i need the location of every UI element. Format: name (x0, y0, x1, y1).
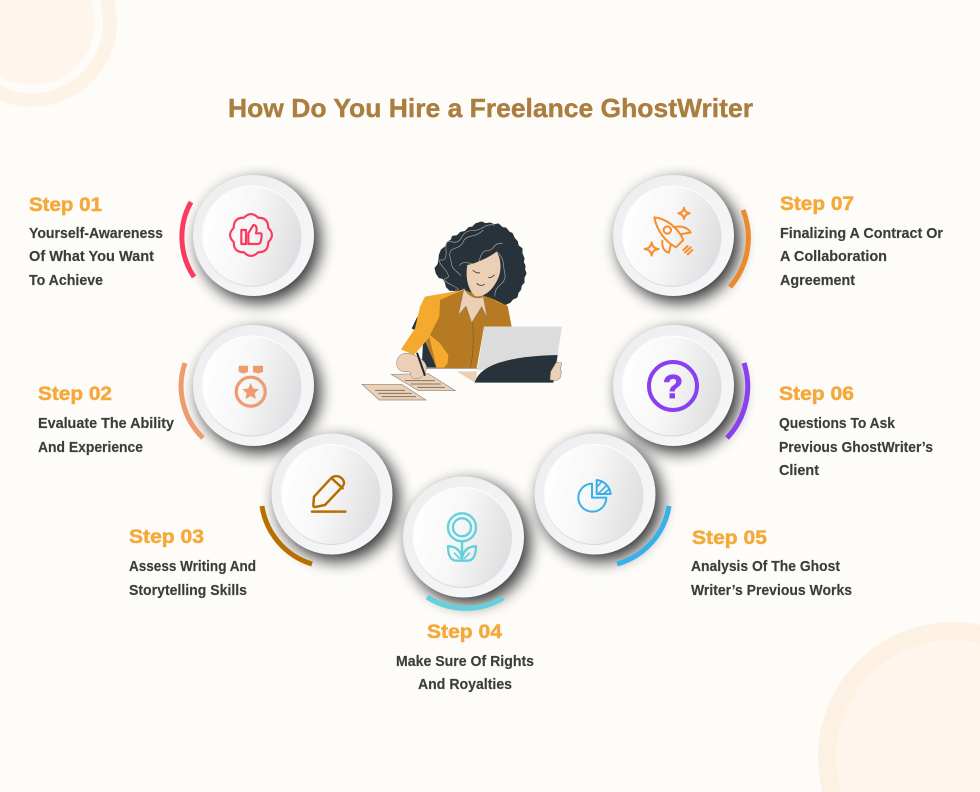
arm shadow (412, 317, 437, 368)
step 07 panel (613, 175, 943, 302)
step 06 arc (727, 363, 748, 438)
step 01 description: To Achieve (29, 273, 103, 289)
pen (417, 353, 425, 376)
step 01 label: Step 01 (29, 194, 102, 216)
step 03 description: Assess Writing And (129, 559, 256, 575)
step 01 description: Of What You Want (29, 249, 154, 265)
tablet screen (477, 327, 562, 371)
step 06 panel (613, 325, 933, 479)
step 05 disc (534, 434, 662, 561)
sleeve (401, 290, 508, 368)
table line (426, 367, 477, 370)
icon: question mark (649, 362, 697, 410)
collar (458, 288, 487, 323)
step 05 label: Step 05 (692, 527, 767, 549)
step 04 description: Make Sure Of Rights (396, 654, 534, 670)
step 06 label: Step 06 (779, 383, 854, 405)
step 04 disc (403, 476, 530, 604)
step 07 description: Agreement (780, 273, 855, 289)
icon: question mark: ? (663, 368, 683, 405)
step 07 description: Finalizing A Contract Or (780, 226, 943, 242)
step 02 description: And Experience (38, 440, 143, 456)
step 05 panel (534, 434, 852, 599)
step 04 label: Step 04 (427, 621, 502, 643)
step 05 description: Analysis Of The Ghost (691, 559, 840, 575)
hair (435, 222, 526, 304)
step 07 description: A Collaboration (780, 249, 887, 265)
step 03 description: Storytelling Skills (129, 583, 247, 599)
step 06 description: Previous GhostWriter’s (779, 440, 933, 456)
step 03 disc (272, 434, 398, 561)
decoration: top-left circle (0, 0, 117, 107)
step 01 panel (29, 175, 320, 302)
icon: rocket (645, 208, 692, 256)
tablet back (475, 355, 558, 383)
icon: medal (236, 366, 265, 406)
paper one (391, 374, 455, 391)
step 05 description: Writer’s Previous Works (691, 583, 852, 599)
icon: flower (448, 513, 476, 561)
tablet paper (457, 371, 477, 383)
decoration: bottom-right circle (818, 622, 980, 792)
hair highlights (439, 225, 505, 297)
step 02 panel (38, 325, 320, 456)
hand right (550, 363, 562, 380)
step 03 panel (129, 434, 398, 599)
shirt (425, 290, 512, 368)
step 04 description: And Royalties (418, 677, 512, 693)
step 06 description: Questions To Ask (779, 416, 896, 432)
step 02 description: Evaluate The Ability (38, 416, 175, 432)
step 02 arc (181, 363, 203, 438)
step 07 label: Step 07 (780, 193, 854, 215)
step 05 arc (617, 506, 669, 564)
icon: pie chart (578, 480, 611, 512)
shirt seam (471, 323, 473, 368)
face and neck (467, 252, 501, 296)
step 01 arc (182, 202, 194, 277)
step 01 description: Yourself-Awareness (29, 226, 163, 242)
step 07 disc (613, 175, 740, 302)
step 01 disc (193, 175, 320, 302)
hand left (397, 353, 427, 379)
step 04 panel (396, 476, 534, 693)
title: How Do You Hire a Freelance GhostWriter (228, 93, 753, 123)
paper two (362, 384, 426, 400)
eyes and mouth (473, 270, 495, 285)
illustration: woman writing (362, 222, 562, 400)
step 02 disc (193, 325, 320, 452)
step 03 arc (262, 506, 312, 564)
step 07 arc (730, 210, 748, 287)
step 04 arc (427, 597, 503, 608)
step 06 description: Client (779, 463, 819, 479)
step 03 label: Step 03 (129, 526, 204, 548)
step 06 disc (613, 325, 740, 452)
step 02 label: Step 02 (38, 383, 112, 405)
icon: pencil (312, 476, 345, 512)
icon: thumbs-up badge (230, 214, 272, 256)
